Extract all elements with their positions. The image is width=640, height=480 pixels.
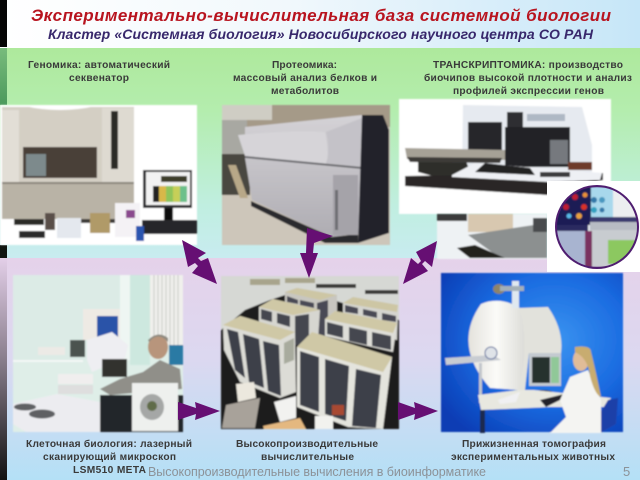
- sample bed: [445, 355, 501, 365]
- monitor: [143, 170, 192, 208]
- label: proteomics: метаболитов: [271, 85, 339, 97]
- label: high-performance computing: Высокопроизводительные: [236, 439, 378, 450]
- front left cabinets: [223, 316, 296, 398]
- label: genomics: Геномика: автоматический: [28, 60, 170, 71]
- arrow: genomics to cluster: [182, 240, 217, 284]
- second row left: [259, 299, 320, 342]
- deck: [452, 163, 602, 182]
- label: proteomics: массовый анализ белков и: [233, 72, 377, 84]
- scanner front: [468, 301, 525, 390]
- second row right: [325, 311, 397, 352]
- panel: green upper zone: [0, 48, 640, 258]
- photo: biochip circle: [547, 181, 640, 272]
- photo: microarray robot: [399, 99, 611, 214]
- photo: sequencer: [0, 105, 197, 245]
- kit boxes: [115, 203, 140, 237]
- header background: [0, 0, 640, 48]
- monitor: [529, 353, 561, 386]
- label: genomics: [28, 60, 170, 84]
- label: proteomics: Протеомика:: [272, 60, 337, 71]
- label: cell biology: сканирующий микроскоп: [43, 452, 176, 463]
- photo: mass spectrometer: [222, 105, 390, 245]
- dark base: [251, 201, 358, 243]
- rear cabinets: [285, 288, 337, 334]
- operator: [550, 370, 601, 433]
- title: Экспериментально-вычислительная база системной биологии: [31, 6, 612, 25]
- label: in vivo tomography: Прижизненная томография: [462, 438, 606, 450]
- top magnet fitting: [512, 281, 519, 308]
- workstations: [236, 382, 256, 402]
- table: [13, 394, 100, 432]
- photo: tomograph: [441, 273, 623, 433]
- arrow: cluster to tomograph: [398, 402, 438, 420]
- photo: compute cluster: [221, 276, 399, 429]
- front right cabinets: [297, 332, 392, 429]
- label: transcriptomics: профилей экспрессии генов: [453, 85, 604, 97]
- inset: cell image: [132, 383, 178, 431]
- footer: Высокопроизводительные вычисления в биоинформатике: [148, 465, 486, 479]
- label: transcriptomics: биочипов высокой плотности и анализ: [424, 72, 632, 84]
- desk: [478, 390, 611, 410]
- page number: 5: [623, 464, 630, 479]
- dark side: [358, 115, 389, 243]
- panel: lilac lower zone: [0, 258, 640, 480]
- base: [405, 173, 603, 195]
- label: cell biology: Клеточная биология: лазерный: [26, 438, 192, 450]
- label: proteomics: [233, 60, 377, 97]
- label: high-performance computing: вычислительные: [261, 452, 354, 463]
- label: transcriptomics: [424, 60, 632, 97]
- label: high-performance computing: [236, 439, 378, 463]
- photo: laser scanning microscope: [13, 275, 183, 432]
- label: transcriptomics: ТРАНСКРИПТОМИКА: производство: [433, 60, 623, 71]
- photo: microarray lab strip: [437, 214, 547, 259]
- label: genomics: секвенатор: [69, 73, 129, 84]
- label: cell biology: LSM510 META: [73, 465, 147, 476]
- dark bench: [100, 395, 183, 432]
- confocal head: [83, 309, 120, 340]
- label: cell biology: [26, 438, 192, 476]
- arrow: transcriptomics to cluster: [403, 241, 437, 284]
- label: in vivo tomography: [451, 438, 615, 463]
- arrow: microscope to cluster: [178, 402, 220, 420]
- scanner rear barrel: [515, 307, 561, 390]
- left edge strip: [0, 0, 7, 480]
- arrow: proteomics to cluster: [300, 228, 333, 278]
- machine body: [245, 115, 362, 237]
- chair: [596, 398, 618, 433]
- label: in vivo tomography: экспериментальных животных: [451, 452, 615, 463]
- operator: [148, 335, 168, 359]
- subtitle: Кластер «Системная биология» Новосибирского научного центра СО РАН: [48, 26, 594, 42]
